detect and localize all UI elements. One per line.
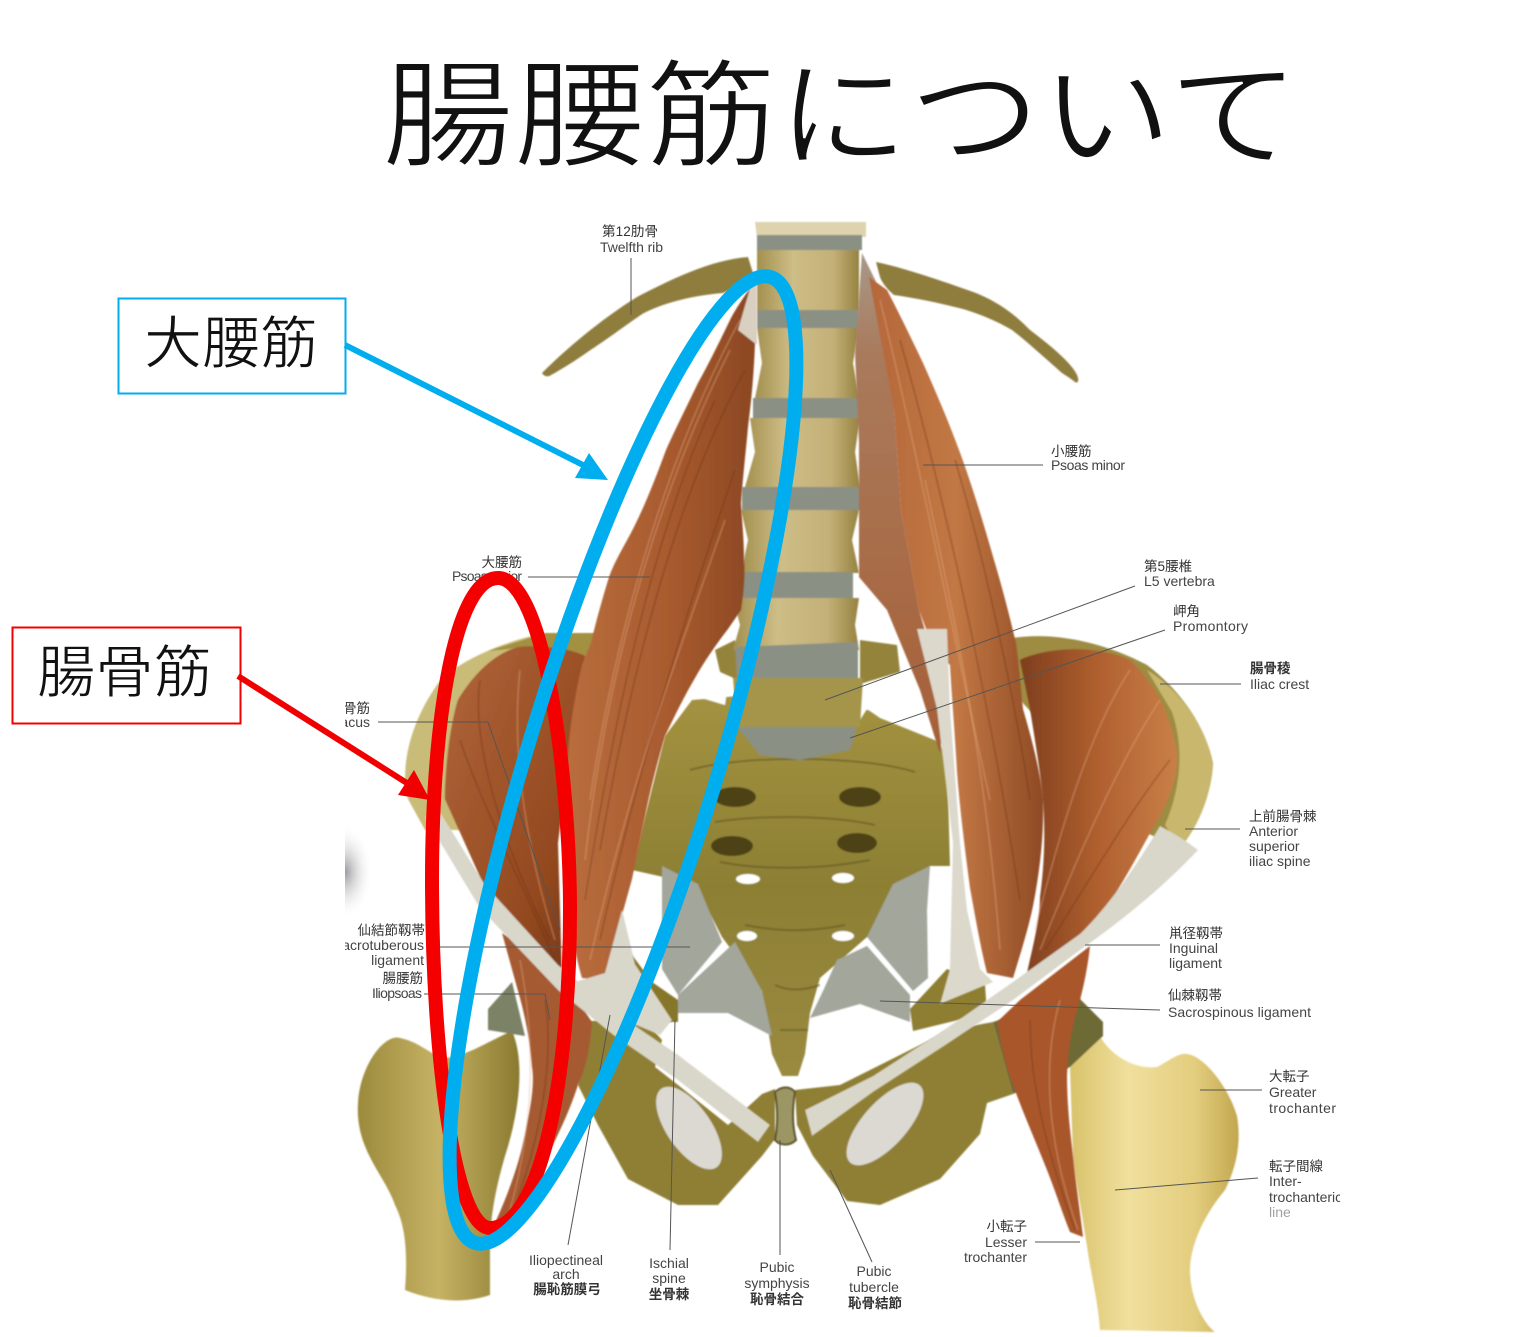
bones and ligaments base <box>358 222 1239 1332</box>
title: 腸腰筋について <box>382 22 1300 191</box>
left pubic ramus <box>578 1015 775 1205</box>
label: lesser trochanter: 小転子 <box>986 1219 1027 1234</box>
labels: bottom: spine <box>652 1270 686 1286</box>
inguinal ligaments <box>425 812 1198 1142</box>
muscle fibres <box>460 300 1170 1230</box>
left ilium crest <box>405 633 595 830</box>
right ilium crest <box>1013 636 1213 848</box>
lumbar spine <box>733 222 866 760</box>
left edge shadow <box>345 838 365 906</box>
labels: right side: Inter- <box>1269 1173 1302 1189</box>
right femur <box>1070 1036 1239 1332</box>
labels: bottom: 坐骨棘 <box>649 1286 690 1302</box>
labels: left side: 仙結節靱帯 <box>358 922 425 938</box>
labels: bottom: Pubic <box>856 1263 892 1279</box>
arrow: blue to psoas major <box>345 345 608 480</box>
labels: right side: L5 vertebra <box>1144 573 1215 589</box>
labels: left side: 腸腰筋 <box>382 970 423 986</box>
labels: right side: 上前腸骨棘 <box>1249 808 1317 824</box>
red outline: iliacus <box>432 578 570 1228</box>
left iliopsoas lower <box>495 933 592 1223</box>
labels: left side: 大腰筋 <box>482 554 522 570</box>
labels: bottom: Pubic <box>759 1259 795 1275</box>
labels: right side: Greater <box>1269 1084 1317 1100</box>
left psoas tendon fringe <box>738 285 757 345</box>
label: lesser trochanter: trochanter <box>964 1249 1027 1265</box>
left psoas major <box>564 287 757 980</box>
left twelfth rib <box>542 257 753 376</box>
right twelfth rib <box>876 262 1078 383</box>
right pubic ramus <box>795 1022 1013 1205</box>
sacral segment lines <box>690 759 915 1030</box>
labels: bottom: 腸恥筋膜弓 <box>533 1281 601 1297</box>
sacrum <box>632 696 950 1076</box>
arrow: red to iliacus <box>238 676 430 800</box>
right psoas main <box>869 277 1043 978</box>
leader lines <box>378 258 1262 1262</box>
label: lesser trochanter <box>964 1219 1027 1265</box>
labels: left side: Psoas major <box>452 568 522 584</box>
labels: left side: Iliacus <box>330 714 370 730</box>
labels: right side: line <box>1269 1204 1291 1220</box>
labels: right side: 転子間線 <box>1269 1159 1323 1174</box>
labels: right side: 仙棘靱帯 <box>1168 988 1222 1003</box>
labels: right side: 大転子 <box>1269 1069 1310 1084</box>
labels: bottom: Iliopectineal <box>529 1252 603 1268</box>
labels: left side <box>330 554 522 1001</box>
callout: 腸骨筋: 腸骨筋 <box>37 627 212 709</box>
labels: right side: Inguinal <box>1169 940 1218 956</box>
labels: right side: Anterior <box>1249 823 1298 839</box>
white gaps beside L5 <box>695 667 728 705</box>
labels: right side: Iliac crest <box>1250 676 1309 692</box>
right acetabulum <box>993 996 1103 1094</box>
callout: 腸骨筋 <box>12 627 240 724</box>
labels: right side: Promontory <box>1173 618 1248 634</box>
right iliacus <box>1020 649 1177 973</box>
intervertebral discs <box>735 235 862 760</box>
right iliopsoas lower <box>997 946 1090 1237</box>
labels: right side: trochanteric <box>1269 1189 1342 1205</box>
labels: right side: iliac spine <box>1249 853 1311 869</box>
labels: right side: 小腰筋 <box>1051 443 1092 459</box>
labels: right side <box>600 223 1342 1220</box>
labels: bottom: 恥骨結節 <box>848 1295 902 1311</box>
labels: bottom: Ischial <box>649 1255 689 1271</box>
left iliacus <box>445 646 585 978</box>
anatomical illustration <box>317 222 1342 1332</box>
labels: right side: 第5腰椎 <box>1144 558 1193 574</box>
labels: right side: superior <box>1249 838 1300 854</box>
callout: 大腰筋 <box>118 298 346 394</box>
label: lesser trochanter: Lesser <box>985 1234 1027 1250</box>
labels: bottom: arch <box>552 1266 580 1282</box>
obturator membranes <box>643 1076 735 1180</box>
labels: left side: ligament <box>371 952 424 968</box>
sacral foramina <box>711 787 881 941</box>
labels: right side: 第12肋骨 <box>602 223 658 239</box>
labels: right side: 岬角 <box>1173 604 1200 619</box>
left femoral capsule <box>488 982 525 1036</box>
iliopectineal arch <box>575 910 672 1035</box>
callout: 大腰筋: 大腰筋 <box>144 298 318 380</box>
pubic symphysis <box>775 1088 796 1144</box>
labels: right side: Sacrospinous ligament <box>1168 1004 1311 1020</box>
labels: right side: 鼡径靱帯 <box>1169 926 1223 941</box>
muscles <box>425 253 1198 1237</box>
labels: right side: trochanter <box>1269 1100 1336 1116</box>
labels: right side: 腸骨稜 <box>1250 660 1291 676</box>
labels: bottom: symphysis <box>744 1275 810 1291</box>
labels: right side: Psoas minor <box>1051 457 1125 473</box>
left femur <box>358 1031 519 1300</box>
labels: left side: Sacrotuberous <box>333 937 424 953</box>
labels: left side: Iliopsoas <box>372 985 422 1001</box>
blue ellipse: psoas major <box>385 249 861 1271</box>
labels: right side: Twelfth rib <box>600 239 663 255</box>
labels: right side: ligament <box>1169 955 1222 971</box>
sacrospinous and sacrotuberous ligaments <box>662 866 930 1036</box>
labels: bottom: 恥骨結合 <box>750 1291 804 1307</box>
ischial spines <box>628 955 678 1022</box>
psoas minor tendon <box>917 629 993 1004</box>
labels: bottom <box>529 1252 902 1311</box>
right psoas inner bundle <box>855 253 945 754</box>
L5 transverse processes <box>860 640 900 684</box>
labels: bottom: tubercle <box>849 1279 899 1295</box>
labels: left side: 腸骨筋 <box>330 700 370 716</box>
